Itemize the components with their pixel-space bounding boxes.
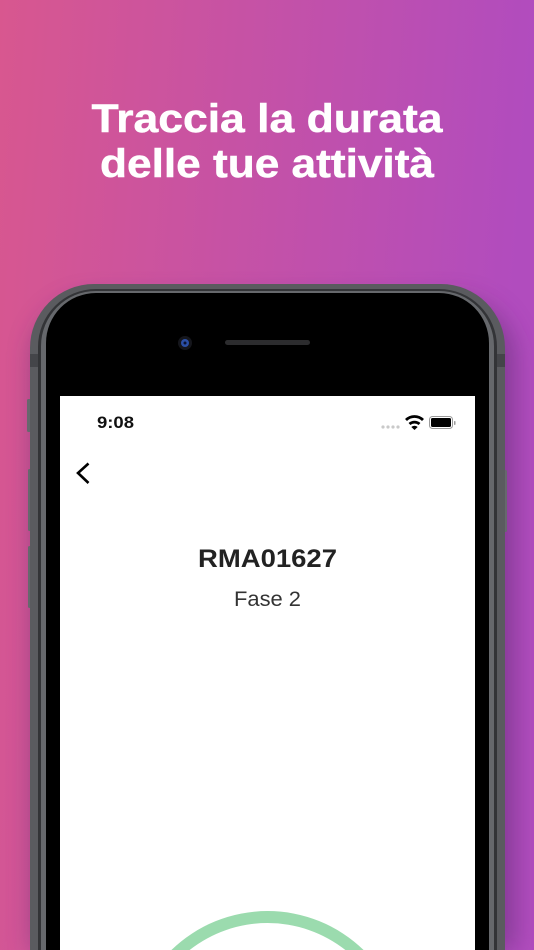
front camera: [178, 336, 192, 350]
icon: battery: [430, 416, 456, 428]
status bar time: 9:08: [97, 413, 134, 432]
phone shadow: [34, 300, 514, 950]
title: delle tue attività: [100, 142, 435, 186]
phase label: Fase 2: [234, 588, 301, 611]
phone mockup: [27, 284, 507, 950]
side buttons: [27, 399, 507, 608]
screen: [60, 396, 475, 950]
title: [92, 97, 443, 186]
title: Traccia la durata: [92, 97, 443, 141]
speaker: [225, 340, 310, 345]
icon: wifi: [406, 416, 423, 430]
phone body: [30, 284, 505, 950]
progress ring: [171, 911, 364, 950]
signal dots: [381, 425, 400, 429]
record code heading: RMA01627: [198, 545, 337, 573]
back arrow: [78, 464, 88, 483]
